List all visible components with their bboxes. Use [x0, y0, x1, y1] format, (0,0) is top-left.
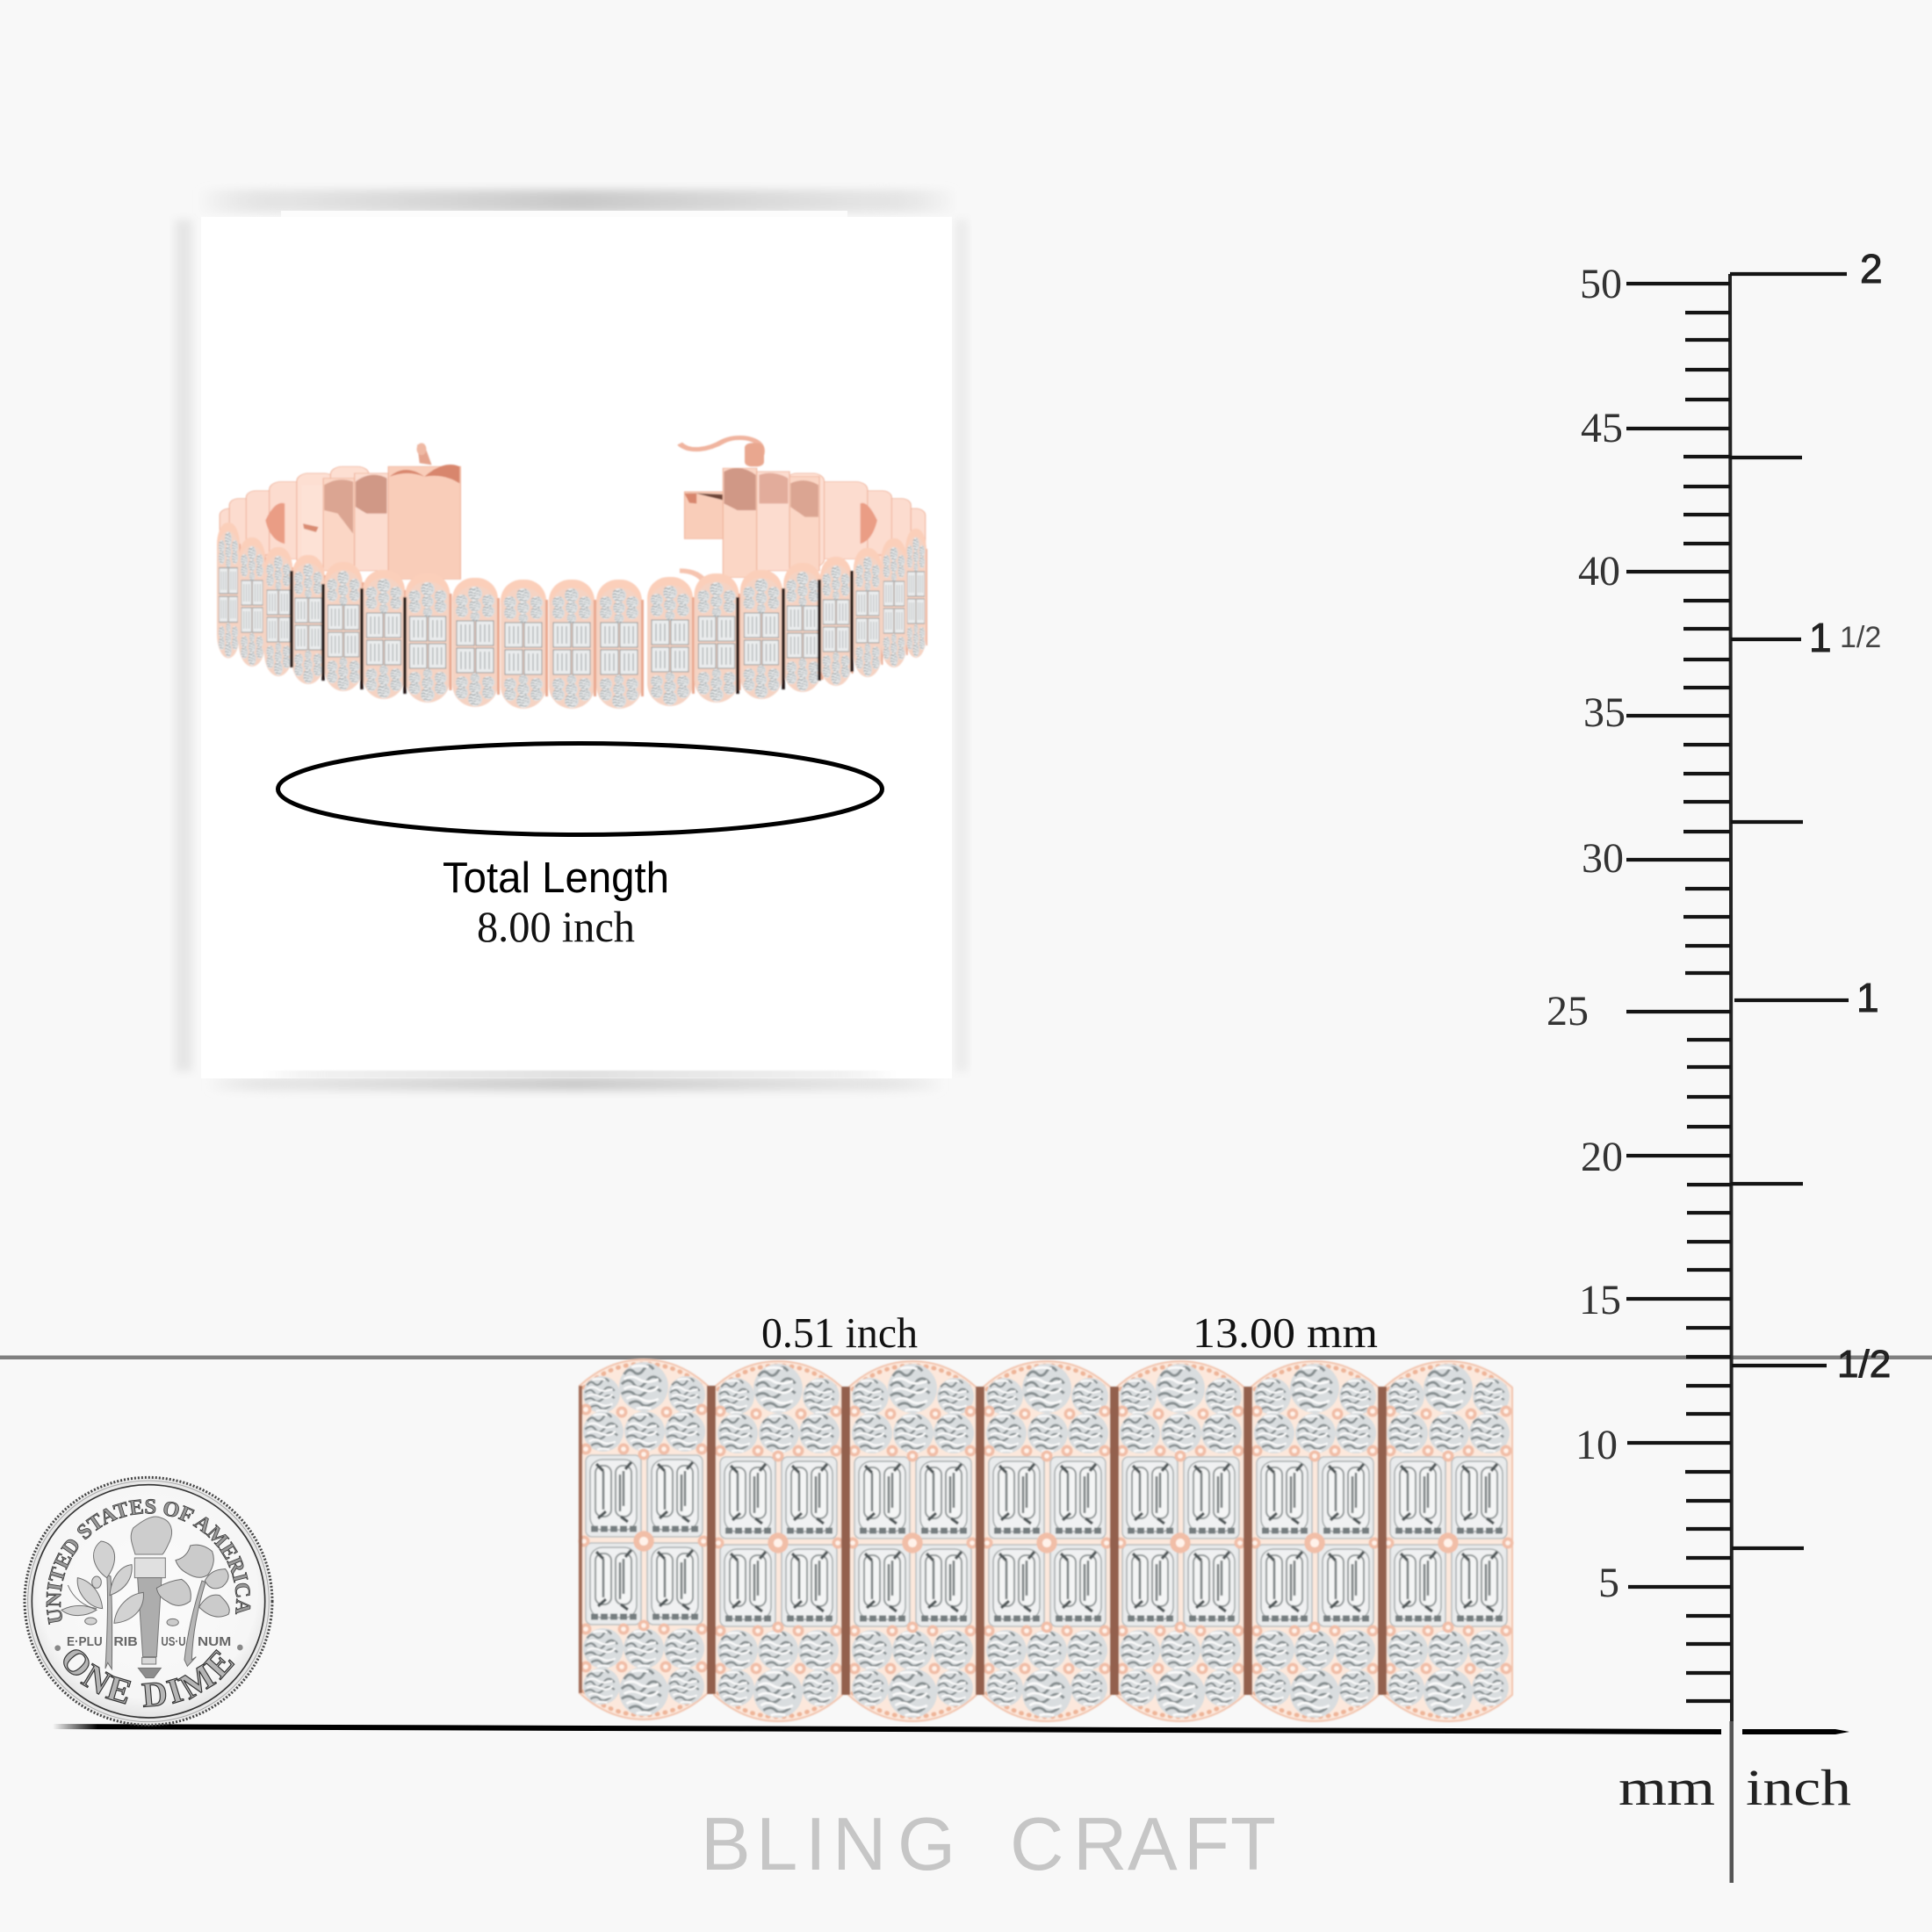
bottom shadow over card	[263, 1071, 896, 1078]
bottom shadow under card	[206, 1077, 944, 1091]
link 7	[1382, 1361, 1514, 1721]
ruler lower axis overlay	[1730, 1721, 1734, 1883]
link 1	[578, 1359, 710, 1719]
baseline	[53, 1724, 1849, 1734]
bracelet links with stones	[217, 523, 927, 709]
mm labels: 35	[1583, 689, 1626, 736]
mm labels: 10	[1575, 1422, 1618, 1468]
link 2	[713, 1361, 843, 1721]
mm labels: 20	[1581, 1134, 1623, 1180]
mm labels: 45	[1581, 405, 1623, 451]
close-up bracelet section	[578, 1359, 1514, 1721]
inch labels: 2	[1860, 246, 1883, 292]
coin motto: NUM	[198, 1635, 231, 1649]
coin legend bottom: ONE DIME	[63, 1649, 235, 1707]
coin motto: US·U	[161, 1635, 186, 1649]
left edge of first link	[579, 1386, 582, 1693]
mm labels: 15	[1579, 1277, 1621, 1323]
panel: bracelet overview card	[175, 190, 968, 1091]
text: total length label: Total Length	[443, 854, 669, 902]
text: total length value: 8.00 inch	[477, 902, 635, 951]
unit label inch: inch	[1746, 1759, 1851, 1816]
inch labels	[1809, 246, 1891, 1386]
right shadow of card	[955, 220, 968, 1071]
top shadow of card	[198, 190, 957, 213]
inch ticks	[1730, 274, 1849, 1548]
icon: one dime coin	[23, 1475, 274, 1727]
inch labels: 1	[1809, 615, 1832, 660]
text: width in inches: 0.51 inch	[761, 1308, 918, 1357]
bracelet back and clasp	[220, 437, 926, 584]
horizontal measurement top line	[0, 1356, 1932, 1359]
mm labels: 30	[1582, 835, 1624, 882]
ruler	[1546, 246, 1891, 1883]
card top extension	[281, 211, 847, 218]
coin motto	[67, 1635, 231, 1649]
link 5	[1115, 1361, 1245, 1721]
inch labels: 1/2	[1837, 1343, 1891, 1386]
inch labels: 1/2	[1840, 621, 1881, 654]
coin motto: RIB	[113, 1635, 138, 1649]
link 4	[982, 1361, 1112, 1721]
millimetre minor ticks	[1683, 313, 1731, 1701]
left shadow of card	[175, 220, 192, 1071]
link separators	[711, 1386, 1382, 1695]
watermark: BLING CRAFT: BLING CRAFT	[701, 1803, 1276, 1886]
coin motto: E·PLU	[67, 1635, 103, 1649]
text: width in millimetres: 13.00 mm	[1193, 1308, 1378, 1357]
total length ellipse	[278, 743, 882, 834]
coin olive branch	[61, 1541, 143, 1669]
unit label mm: mm	[1618, 1759, 1715, 1816]
coin legend top: UNITED STATES OF AMERICA	[46, 1498, 251, 1625]
ruler vertical axis	[1730, 274, 1732, 1726]
link 6	[1249, 1361, 1381, 1721]
coin torch	[131, 1517, 172, 1678]
mm labels: 40	[1578, 548, 1620, 595]
white card	[201, 217, 952, 1078]
inch labels: 1	[1856, 975, 1879, 1020]
mm labels	[1546, 261, 1626, 1606]
link 3	[847, 1361, 978, 1721]
mm labels: 50	[1580, 261, 1622, 307]
mm labels: 25	[1546, 988, 1589, 1034]
bracelet overview image	[217, 437, 927, 709]
coin oak branch	[156, 1545, 229, 1666]
millimetre major ticks	[1626, 284, 1731, 1587]
mm labels: 5	[1598, 1560, 1619, 1606]
